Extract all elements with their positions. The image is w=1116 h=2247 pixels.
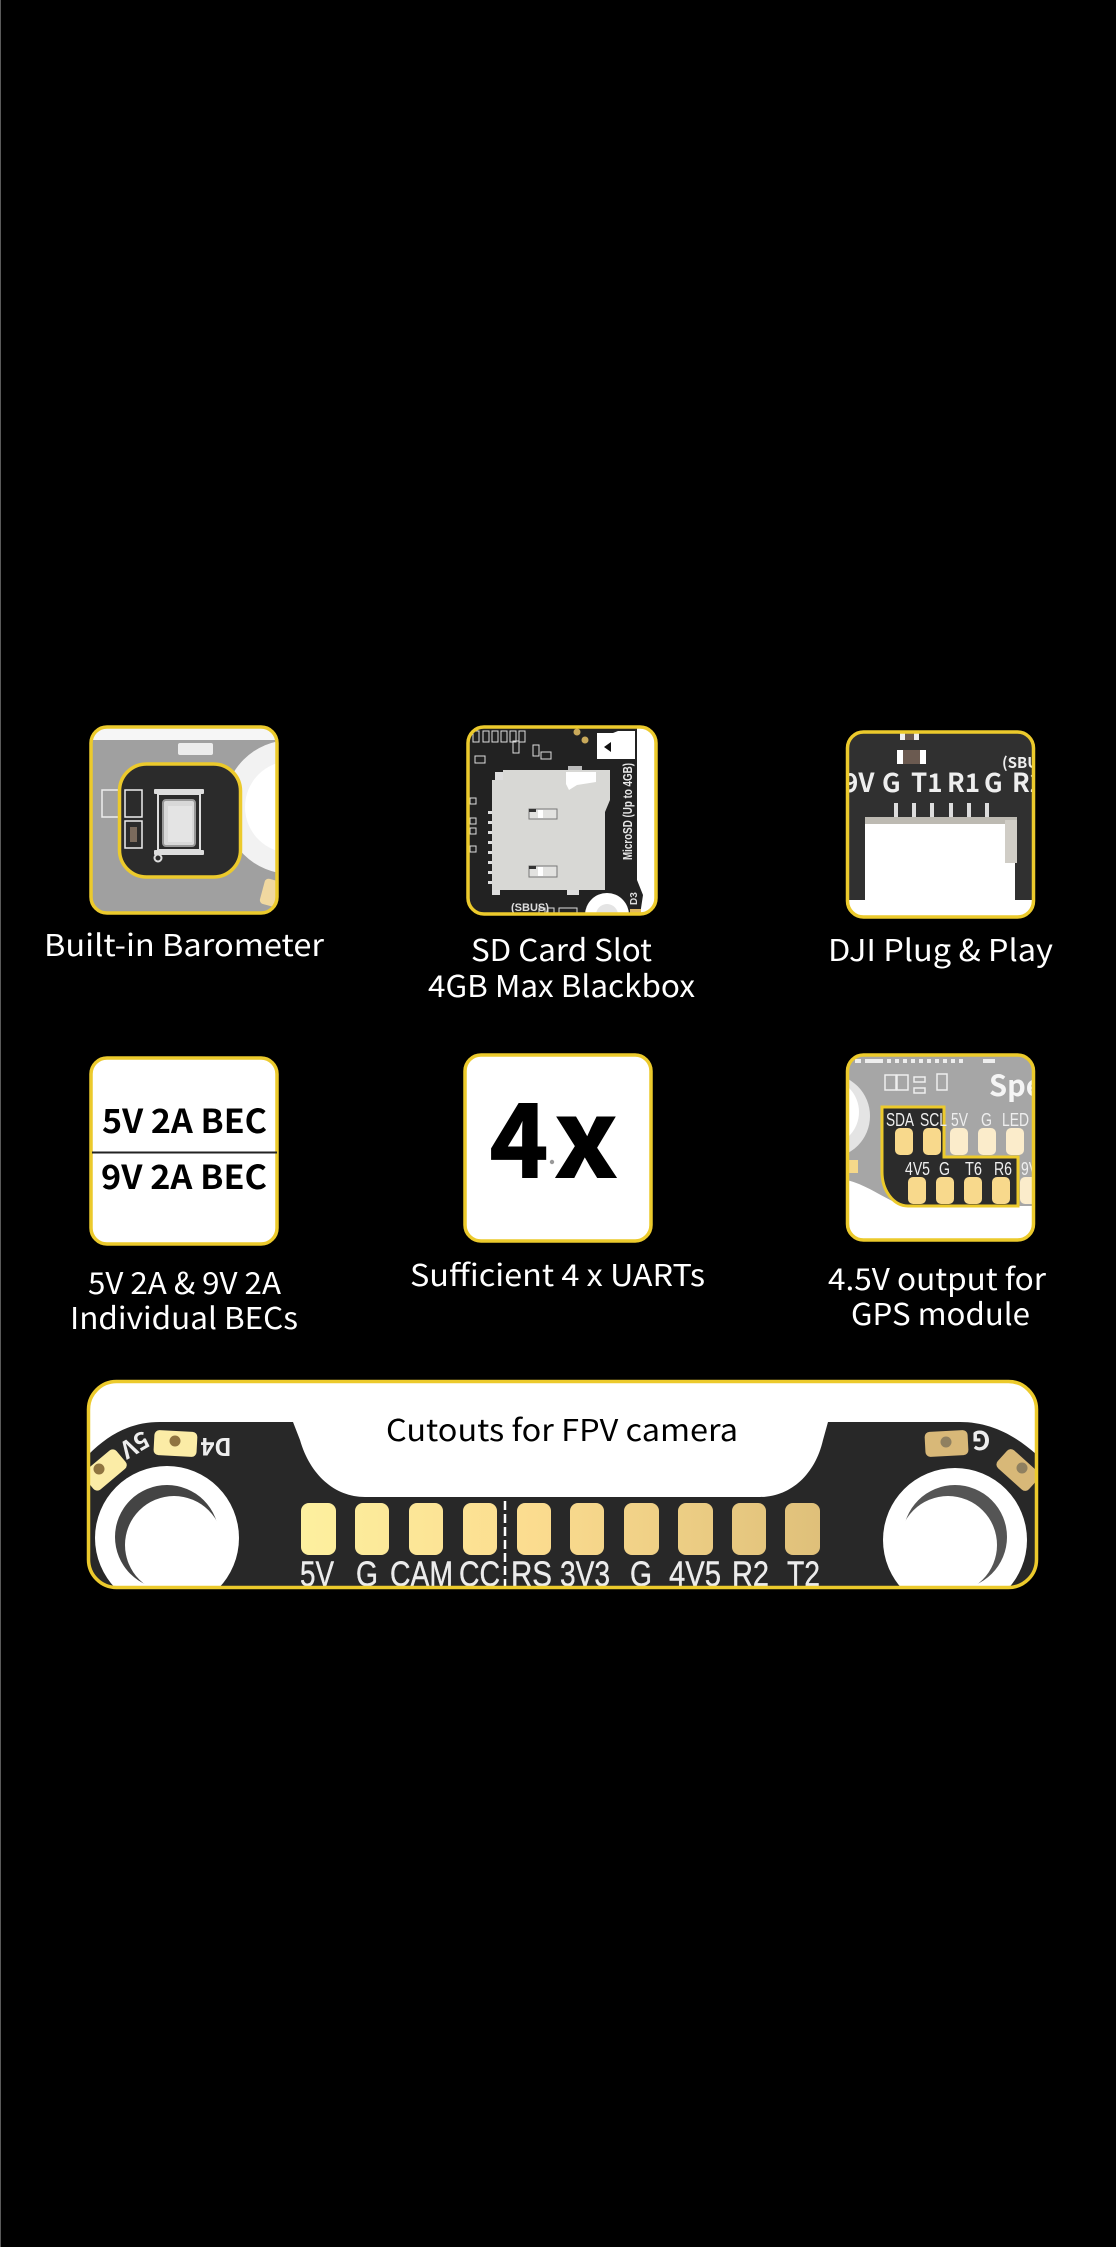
caption: 4x UARTs: Sufficient 4 x UARTs — [410, 1251, 705, 1295]
connector pin labels: G — [882, 763, 901, 800]
panel: built-in barometer — [89, 725, 279, 915]
caption: GPS 4.5V output — [828, 1255, 1046, 1334]
right solder pads — [924, 1430, 1035, 1491]
banner caption: Cutouts for FPV camera — [386, 1406, 738, 1450]
SD card socket — [488, 766, 610, 895]
left solder pads: D4 — [200, 1431, 232, 1466]
GPS pad labels: G — [981, 1110, 992, 1130]
camera connector pad labels: 4V5 — [669, 1555, 721, 1594]
camera connector pad labels: T2 — [787, 1555, 820, 1594]
camera connector pad labels: 3V3 — [560, 1555, 610, 1594]
caption: individual BECs: 5V 2A & 9V 2A — [88, 1259, 282, 1303]
camera connector pad labels: G — [630, 1555, 652, 1594]
panel: DJI plug and play — [843, 732, 1053, 918]
panel: 4x UARTs: x — [555, 1054, 617, 1208]
GPS pad labels: 4V5 — [905, 1159, 930, 1179]
connector pin labels: 9V — [843, 763, 875, 800]
panel: cutouts for FPV camera — [81, 1381, 1042, 1612]
connector pin labels: T1 — [911, 763, 943, 800]
connector pin labels: R2 — [1012, 763, 1045, 800]
GPS pad labels: 9V — [1021, 1159, 1038, 1179]
left solder pads — [90, 1430, 230, 1491]
camera connector pad labels: RS — [511, 1555, 552, 1594]
camera connector pad labels: R2 — [732, 1555, 769, 1594]
camera connector pads — [301, 1503, 820, 1555]
camera connector pad labels: CAM — [390, 1555, 453, 1594]
panel: dual BEC: 5V 2A BEC — [102, 1095, 267, 1143]
connector pin labels: (SBUS) — [1002, 752, 1053, 773]
caption: built-in barometer: Built-in Barometer — [44, 921, 324, 965]
GPS pad labels: R6 — [994, 1159, 1012, 1179]
white JST connector — [847, 817, 1034, 918]
caption: SD card slot: SD Card Slot — [471, 926, 652, 970]
GPS pad labels — [886, 1113, 1032, 1175]
camera connector pad labels: G — [356, 1555, 378, 1594]
panel: dual BEC: 9V 2A BEC — [101, 1151, 267, 1199]
camera connector pad labels: 5V — [300, 1555, 335, 1594]
camera connector pad labels: CC — [459, 1555, 500, 1594]
pads outside highlight — [950, 1128, 1040, 1204]
panel: 4x UARTs — [465, 1054, 651, 1241]
caption: SD card slot: 4GB Max Blackbox — [428, 962, 695, 1006]
panel: SD card slot: (SBUS) — [511, 902, 549, 914]
camera connector pad labels — [300, 1561, 819, 1586]
connector pin labels — [849, 756, 1032, 792]
caption: DJI plug and play: DJI Plug & Play — [828, 926, 1053, 970]
barometer highlight inset — [120, 764, 240, 877]
caption: individual BECs: Individual BECs — [70, 1294, 298, 1338]
panel: 4x UARTs: 4 — [490, 1061, 548, 1207]
left mounting hole — [95, 1466, 239, 1586]
panel: GPS 4.5V output: Spe — [989, 1063, 1043, 1105]
panel: dual BEC — [91, 1058, 277, 1244]
GPS pad labels: LED — [1002, 1110, 1029, 1130]
right solder pads: G — [972, 1423, 990, 1460]
caption: individual BECs — [70, 1259, 298, 1338]
MicroSD silkscreen label: MicroSD (Up to 4GB) — [620, 763, 635, 860]
caption: GPS 4.5V output: 4.5V output for — [828, 1255, 1046, 1299]
panel: SD card slot — [468, 727, 657, 937]
left solder pads: 5V — [114, 1424, 157, 1469]
connector pin labels: G — [984, 763, 1003, 800]
right mounting hole — [883, 1468, 1027, 1586]
background edge line — [0, 0, 1, 2247]
GPS pad labels: SDA — [886, 1110, 914, 1130]
GPS pad highlight — [882, 1107, 1018, 1206]
panel: GPS 4.5V output — [846, 1053, 1036, 1242]
GPS pad labels: T6 — [965, 1159, 982, 1179]
GPS pad labels: 5V — [951, 1110, 968, 1130]
caption: SD card slot — [428, 926, 695, 1006]
connector pin labels: R1 — [947, 763, 980, 800]
GPS pad labels: G — [939, 1159, 950, 1179]
panel: SD card slot: D3 — [629, 892, 640, 905]
GPS pad labels: SCL — [920, 1110, 947, 1130]
caption: GPS 4.5V output: GPS module — [851, 1290, 1030, 1334]
